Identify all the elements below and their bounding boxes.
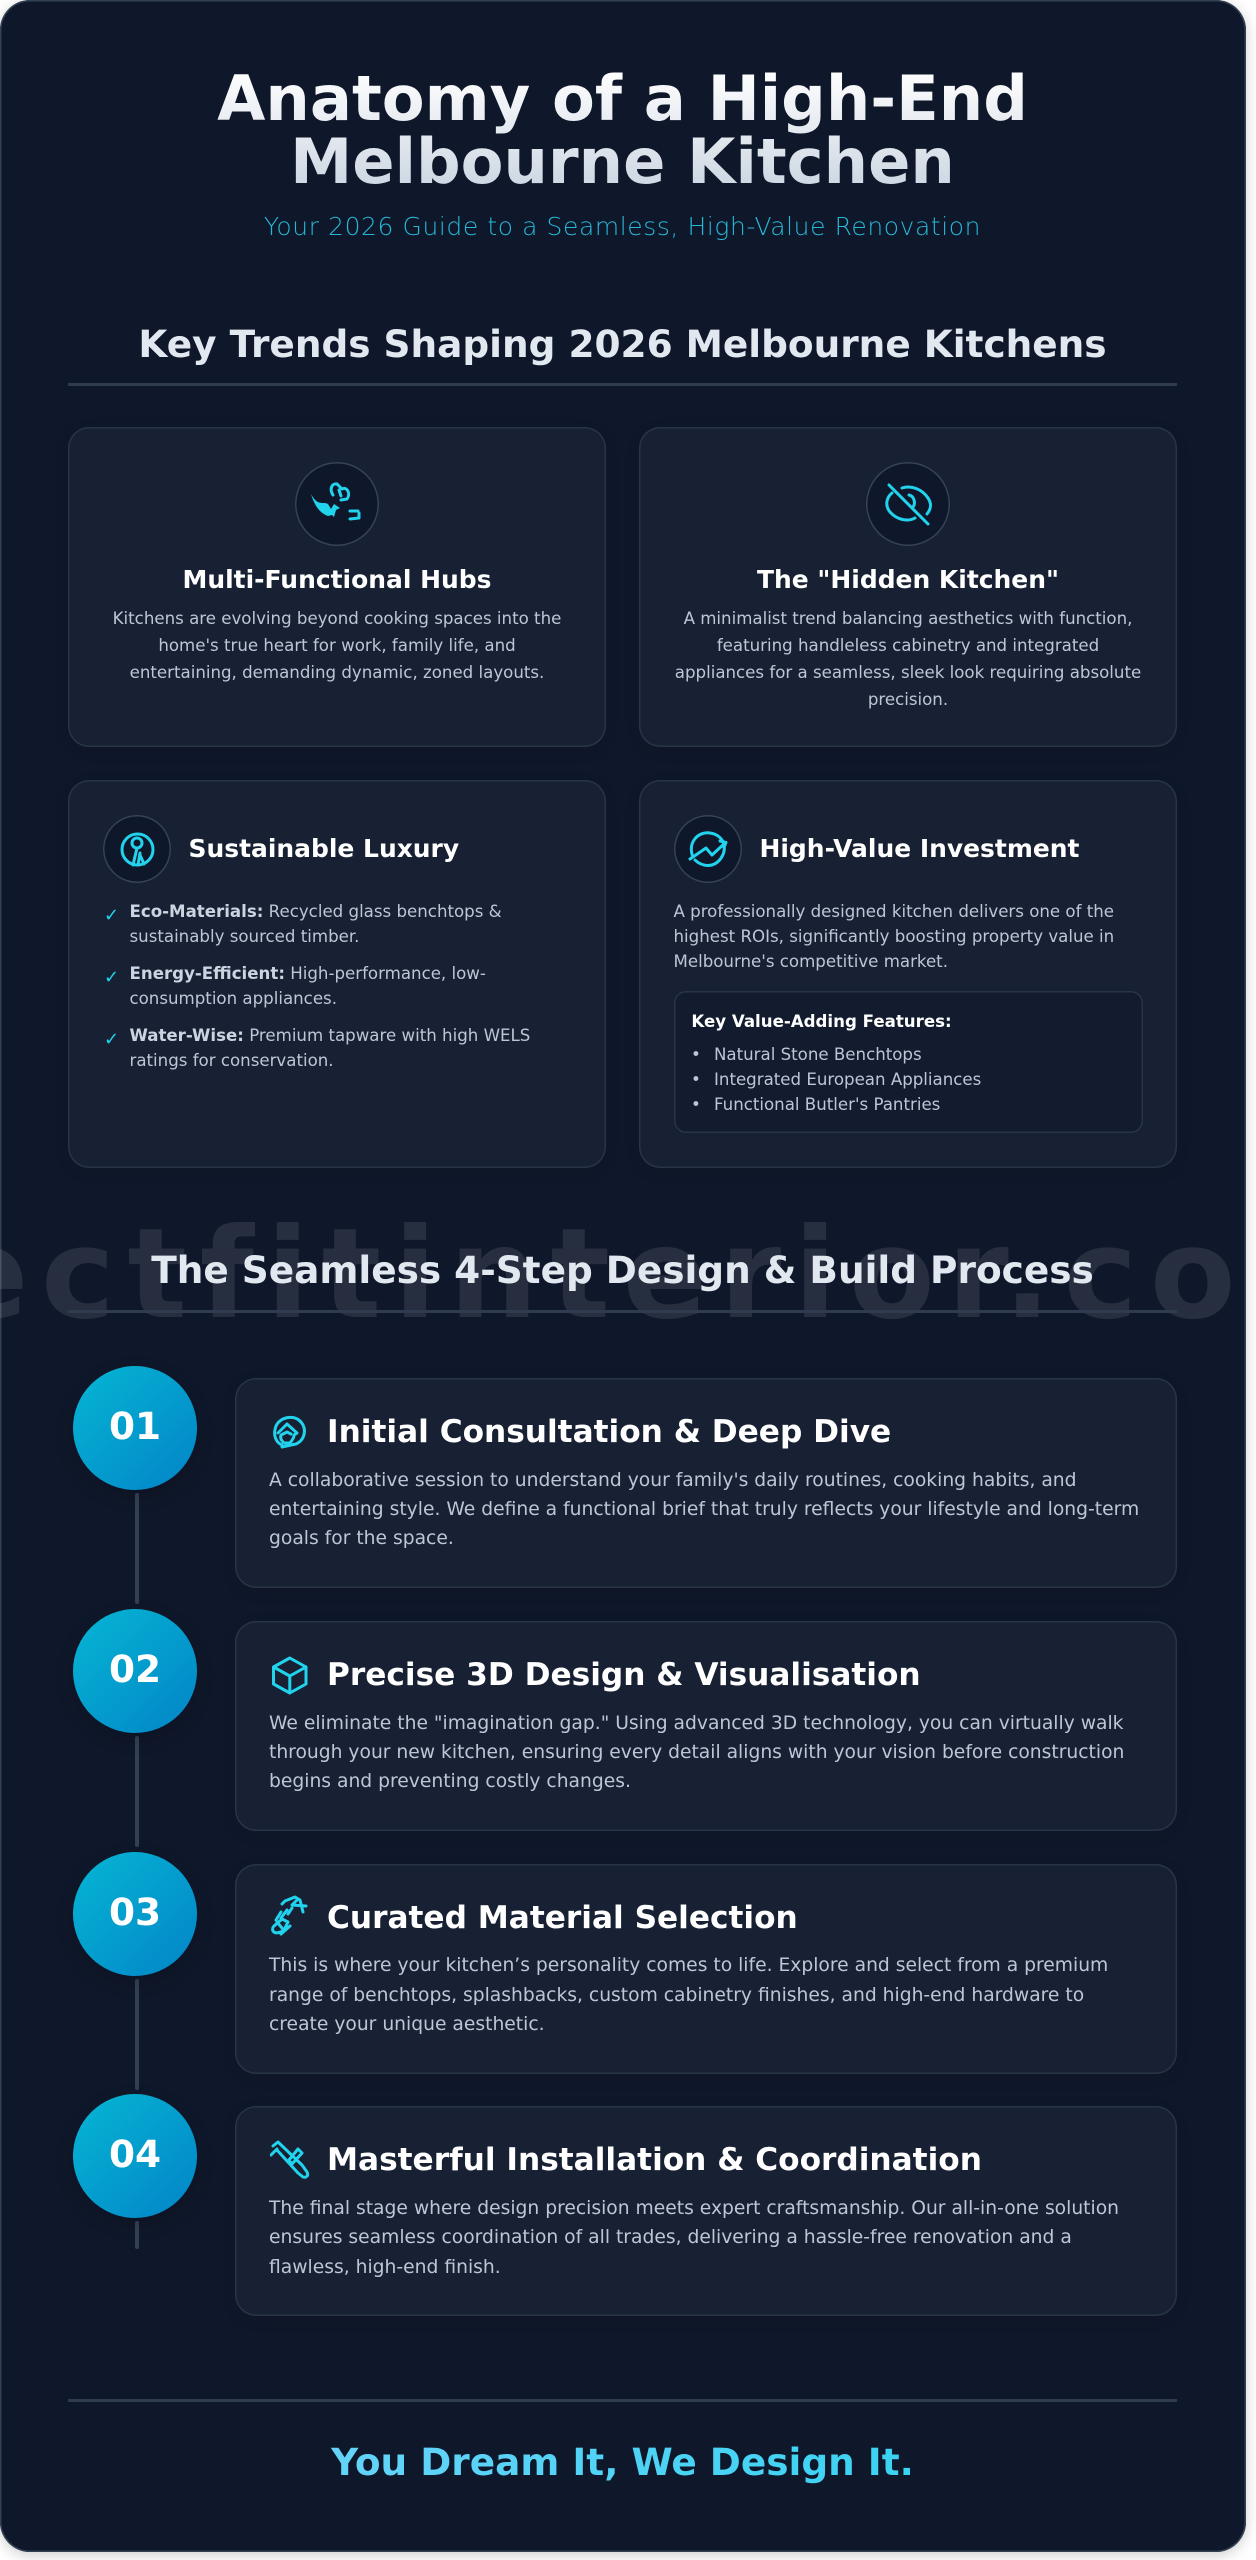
step text <box>268 2198 1119 2278</box>
panel: sustainable luxury: ratings for conservation. <box>130 1051 334 1070</box>
features list: Integrated European Appliances <box>714 1070 981 1089</box>
subtitle: Your 2026 Guide to a Seamless, High-Value Renovation <box>264 212 981 240</box>
step number <box>73 1609 197 1733</box>
features box <box>674 991 1143 1133</box>
step text <box>268 1955 1108 2035</box>
box title: Key Value-Adding Features: <box>691 1012 952 1031</box>
icon: tools <box>270 2140 310 2179</box>
footer tagline <box>0 2440 1245 2484</box>
card text: highest ROIs, significantly boosting property value in <box>674 927 1114 946</box>
check list: Energy-Efficient: High-performance, low- <box>130 964 486 983</box>
card title: High-Value Investment <box>760 834 1079 863</box>
heading: process: The Seamless 4-Step Design & Build Process <box>151 1248 1094 1292</box>
step number: 03 <box>109 1890 161 1934</box>
title: Anatomy of a High-End <box>217 62 1028 135</box>
panel: the hidden kitchen <box>639 427 1177 747</box>
card text: precision. <box>868 690 948 709</box>
panel: high-value investment <box>639 780 1177 1168</box>
icon: sustainable <box>103 815 171 883</box>
step text: begins and preventing costly changes. <box>269 1771 631 1792</box>
card text: featuring handleless cabinetry and integrated <box>717 636 1099 655</box>
step text <box>269 1713 1124 1792</box>
card text: entertaining, demanding dynamic, zoned layouts. <box>130 663 544 682</box>
step text: range of benchtops, splashbacks, custom cabinetry finishes, and high-end hardware to <box>269 1985 1084 2006</box>
features list: • <box>691 1095 701 1114</box>
step text: The final stage where design precision meets expert craftsmanship. Our all-in-one solution <box>269 2198 1119 2219</box>
title: Melbourne Kitchen <box>290 125 955 198</box>
connector <box>135 1736 139 1847</box>
card title: The "Hidden Kitchen" <box>757 565 1059 594</box>
connector <box>135 1493 139 1604</box>
card text <box>675 609 1141 709</box>
check: ✓ <box>104 967 119 988</box>
footer tagline: You Dream It, We Design It. <box>331 2440 914 2484</box>
card text: A professionally designed kitchen delivers one of the <box>674 902 1114 921</box>
card text: appliances for a seamless, sleek look requiring absolute <box>675 663 1141 682</box>
step text <box>269 1470 1139 1549</box>
connector <box>135 2221 139 2249</box>
features list: • <box>691 1070 701 1089</box>
step heading: Initial Consultation & Deep Dive <box>327 1414 891 1450</box>
step 4 <box>73 2094 1177 2316</box>
card text <box>674 902 1114 971</box>
icon: consultation <box>273 1416 306 1448</box>
step number <box>73 1852 197 1976</box>
card text <box>113 609 561 682</box>
step card <box>235 1621 1177 1831</box>
icon: growth chart <box>674 815 742 883</box>
step text: We eliminate the "imagination gap." Using advanced 3D technology, you can virtually walk <box>269 1713 1124 1734</box>
step text: A collaborative session to understand your family's daily routines, cooking habits, and <box>269 1470 1077 1491</box>
step heading: Masterful Installation & Coordination <box>327 2142 982 2178</box>
step card <box>235 2106 1177 2316</box>
features list <box>691 1045 981 1114</box>
features list: • <box>691 1045 701 1064</box>
step 1 <box>73 1366 1177 1604</box>
step 3 <box>73 1852 1177 2090</box>
title <box>0 68 1245 193</box>
features list: Natural Stone Benchtops <box>714 1045 922 1064</box>
step number: 04 <box>109 2132 161 2176</box>
step heading: Curated Material Selection <box>327 1900 798 1936</box>
step text: goals for the space. <box>269 1528 454 1549</box>
card title: Multi-Functional Hubs <box>183 565 491 594</box>
check: ✓ <box>104 1029 119 1050</box>
step card <box>235 1864 1177 2074</box>
card text: home's true heart for work, family life, and <box>158 636 516 655</box>
step text: ensures seamless coordination of all trades, delivering a hassle-free renovation and a <box>269 2227 1072 2248</box>
check: ✓ <box>104 905 119 926</box>
card text: A minimalist trend balancing aesthetics with function, <box>684 609 1132 628</box>
check list: Water-Wise: Premium tapware with high WELS <box>130 1026 530 1045</box>
step text: through your new kitchen, ensuring every detail aligns with your vision before construction <box>269 1742 1124 1763</box>
check list <box>104 902 530 1070</box>
panel: multi-functional hubs <box>68 427 606 747</box>
features list: Functional Butler's Pantries <box>714 1095 940 1114</box>
heading: key trends: Key Trends Shaping 2026 Melbourne Kitchens <box>138 322 1107 366</box>
connector <box>135 1979 139 2090</box>
card title: Sustainable Luxury <box>188 834 459 863</box>
icon: material sample <box>271 1896 308 1936</box>
step card <box>235 1378 1177 1588</box>
step 2 <box>73 1609 1177 1847</box>
card text: Melbourne's competitive market. <box>674 952 948 971</box>
icon: 3D cube <box>272 1656 308 1694</box>
step number: 02 <box>109 1647 161 1691</box>
icon: multi-functional hub <box>295 462 379 546</box>
step number: 01 <box>109 1404 161 1448</box>
step text: This is where your kitchen’s personality comes to life. Explore and select from a premium <box>269 1955 1108 1976</box>
step text: create your unique aesthetic. <box>269 2014 545 2035</box>
step heading: Precise 3D Design & Visualisation <box>327 1657 921 1693</box>
icon: crossed-out eye <box>866 462 950 546</box>
step text: entertaining style. We define a functional brief that truly reflects your lifestyle and long-term <box>269 1499 1139 1520</box>
step number <box>73 1366 197 1490</box>
check list: consumption appliances. <box>130 989 337 1008</box>
panel: sustainable luxury <box>68 780 606 1168</box>
step text: flawless, high-end finish. <box>269 2257 501 2278</box>
check list: sustainably sourced timber. <box>130 927 359 946</box>
check list: Eco-Materials: Recycled glass benchtops & <box>130 902 502 921</box>
card text: Kitchens are evolving beyond cooking spaces into the <box>113 609 561 628</box>
step number <box>73 2094 197 2218</box>
